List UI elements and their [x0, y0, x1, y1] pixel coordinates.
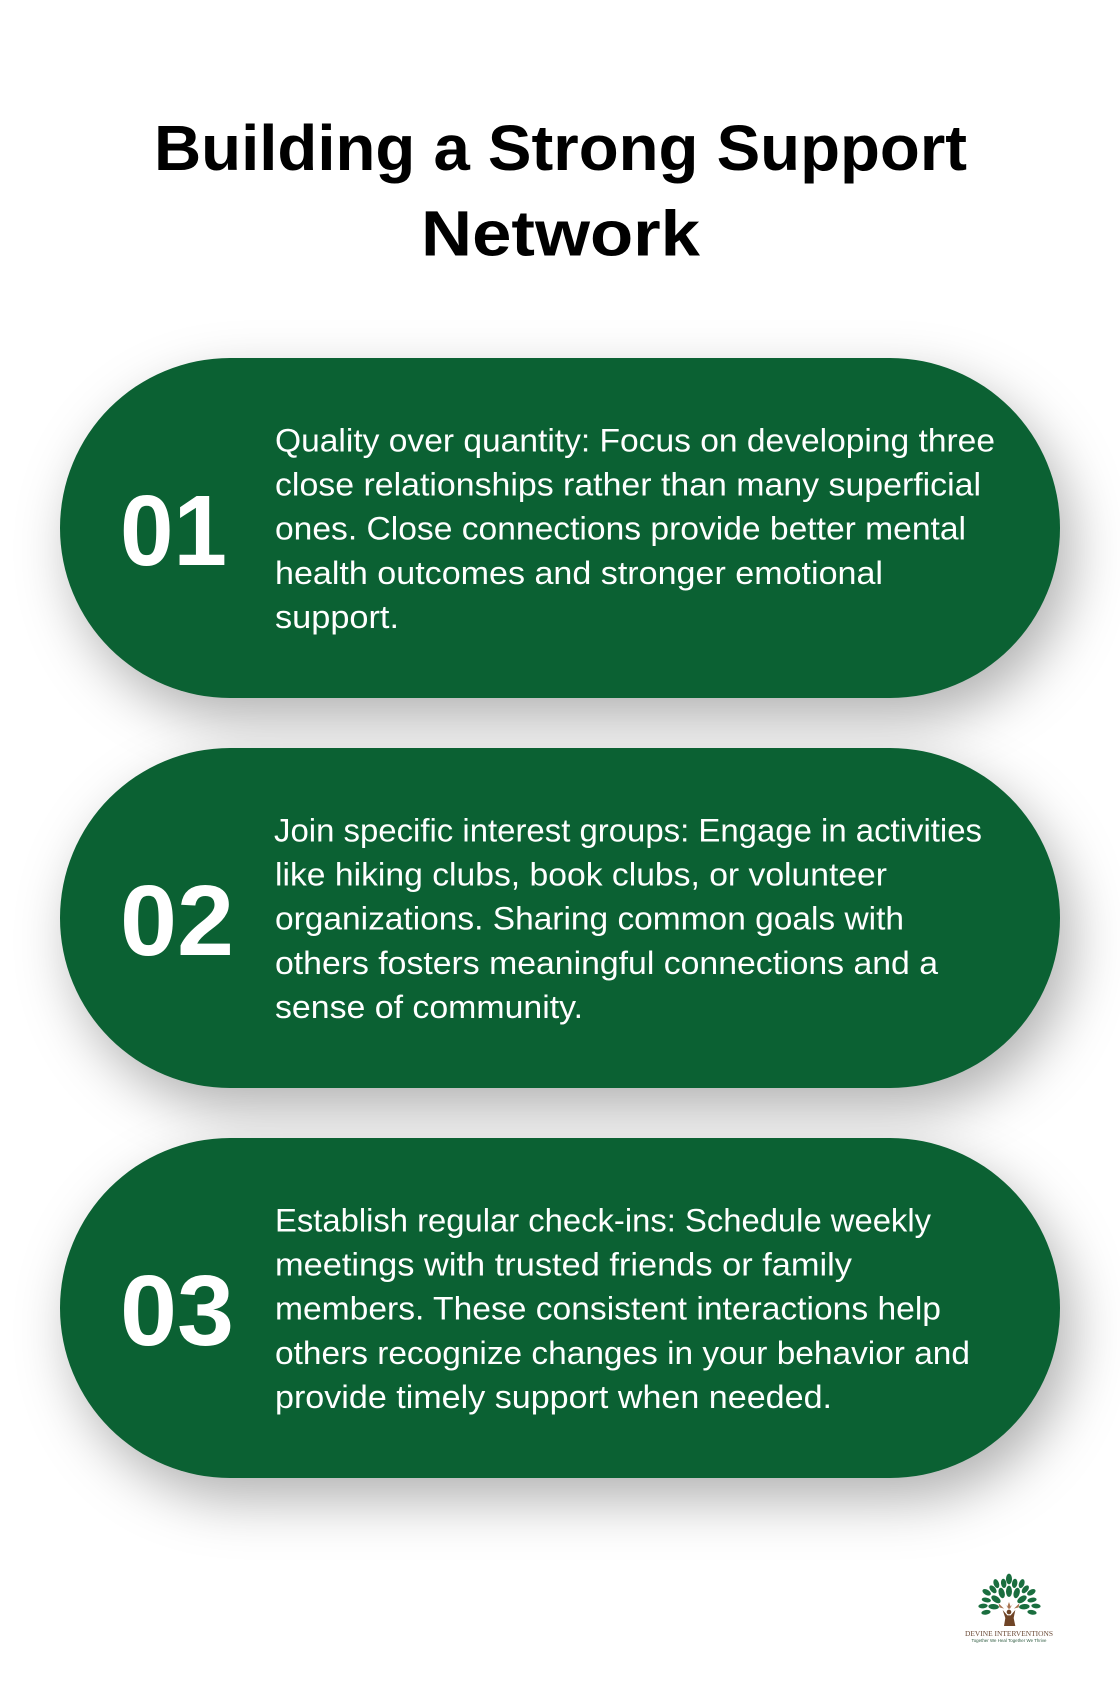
- number 01: 01: [120, 475, 227, 587]
- icon: tree logo: [965, 1574, 1053, 1643]
- text block 02: others fosters meaningful connections and a: [275, 945, 939, 981]
- pill background 01: [60, 358, 1060, 698]
- text block 03: meetings with trusted friends or family: [275, 1246, 853, 1282]
- logo tagline: Together We Heal Together We Thrive: [972, 1638, 1047, 1643]
- text block 03: [275, 1202, 970, 1415]
- logo leaves: [978, 1574, 1041, 1615]
- text block 01: Quality over quantity: Focus on developing three: [275, 422, 995, 458]
- text block 01: support.: [275, 599, 399, 635]
- text block 01: [275, 422, 995, 635]
- text block 02: [274, 812, 982, 1025]
- panel: step 02: [60, 748, 1060, 1088]
- text block 02: organizations. Sharing common goals with: [275, 900, 904, 936]
- text block 01: health outcomes and stronger emotional: [275, 555, 883, 591]
- text block 03: members. These consistent interactions help: [275, 1290, 941, 1326]
- title: Building a Strong Support: [154, 112, 967, 184]
- logo name: DEVINE INTERVENTIONS: [965, 1630, 1053, 1638]
- text block 01: ones. Close connections provide better mental: [275, 510, 966, 546]
- pill background 02: [60, 748, 1060, 1088]
- text block 03: Establish regular check-ins: Schedule weekly: [275, 1202, 932, 1238]
- text block 03: others recognize changes in your behavior and: [275, 1335, 970, 1371]
- logo figure: [999, 1602, 1019, 1626]
- panel: step 03: [60, 1138, 1060, 1478]
- title: [154, 112, 967, 270]
- number 02: 02: [120, 865, 234, 977]
- text block 02: like hiking clubs, book clubs, or volunteer: [275, 856, 887, 892]
- panel: step 01: [60, 358, 1060, 698]
- number 03: 03: [120, 1255, 234, 1367]
- pill background 03: [60, 1138, 1060, 1478]
- text block 01: close relationships rather than many superficial: [275, 466, 981, 502]
- title: Network: [421, 198, 700, 270]
- text block 02: Join specific interest groups: Engage in activities: [274, 812, 982, 848]
- text block 03: provide timely support when needed.: [275, 1379, 832, 1415]
- text block 02: sense of community.: [275, 989, 583, 1025]
